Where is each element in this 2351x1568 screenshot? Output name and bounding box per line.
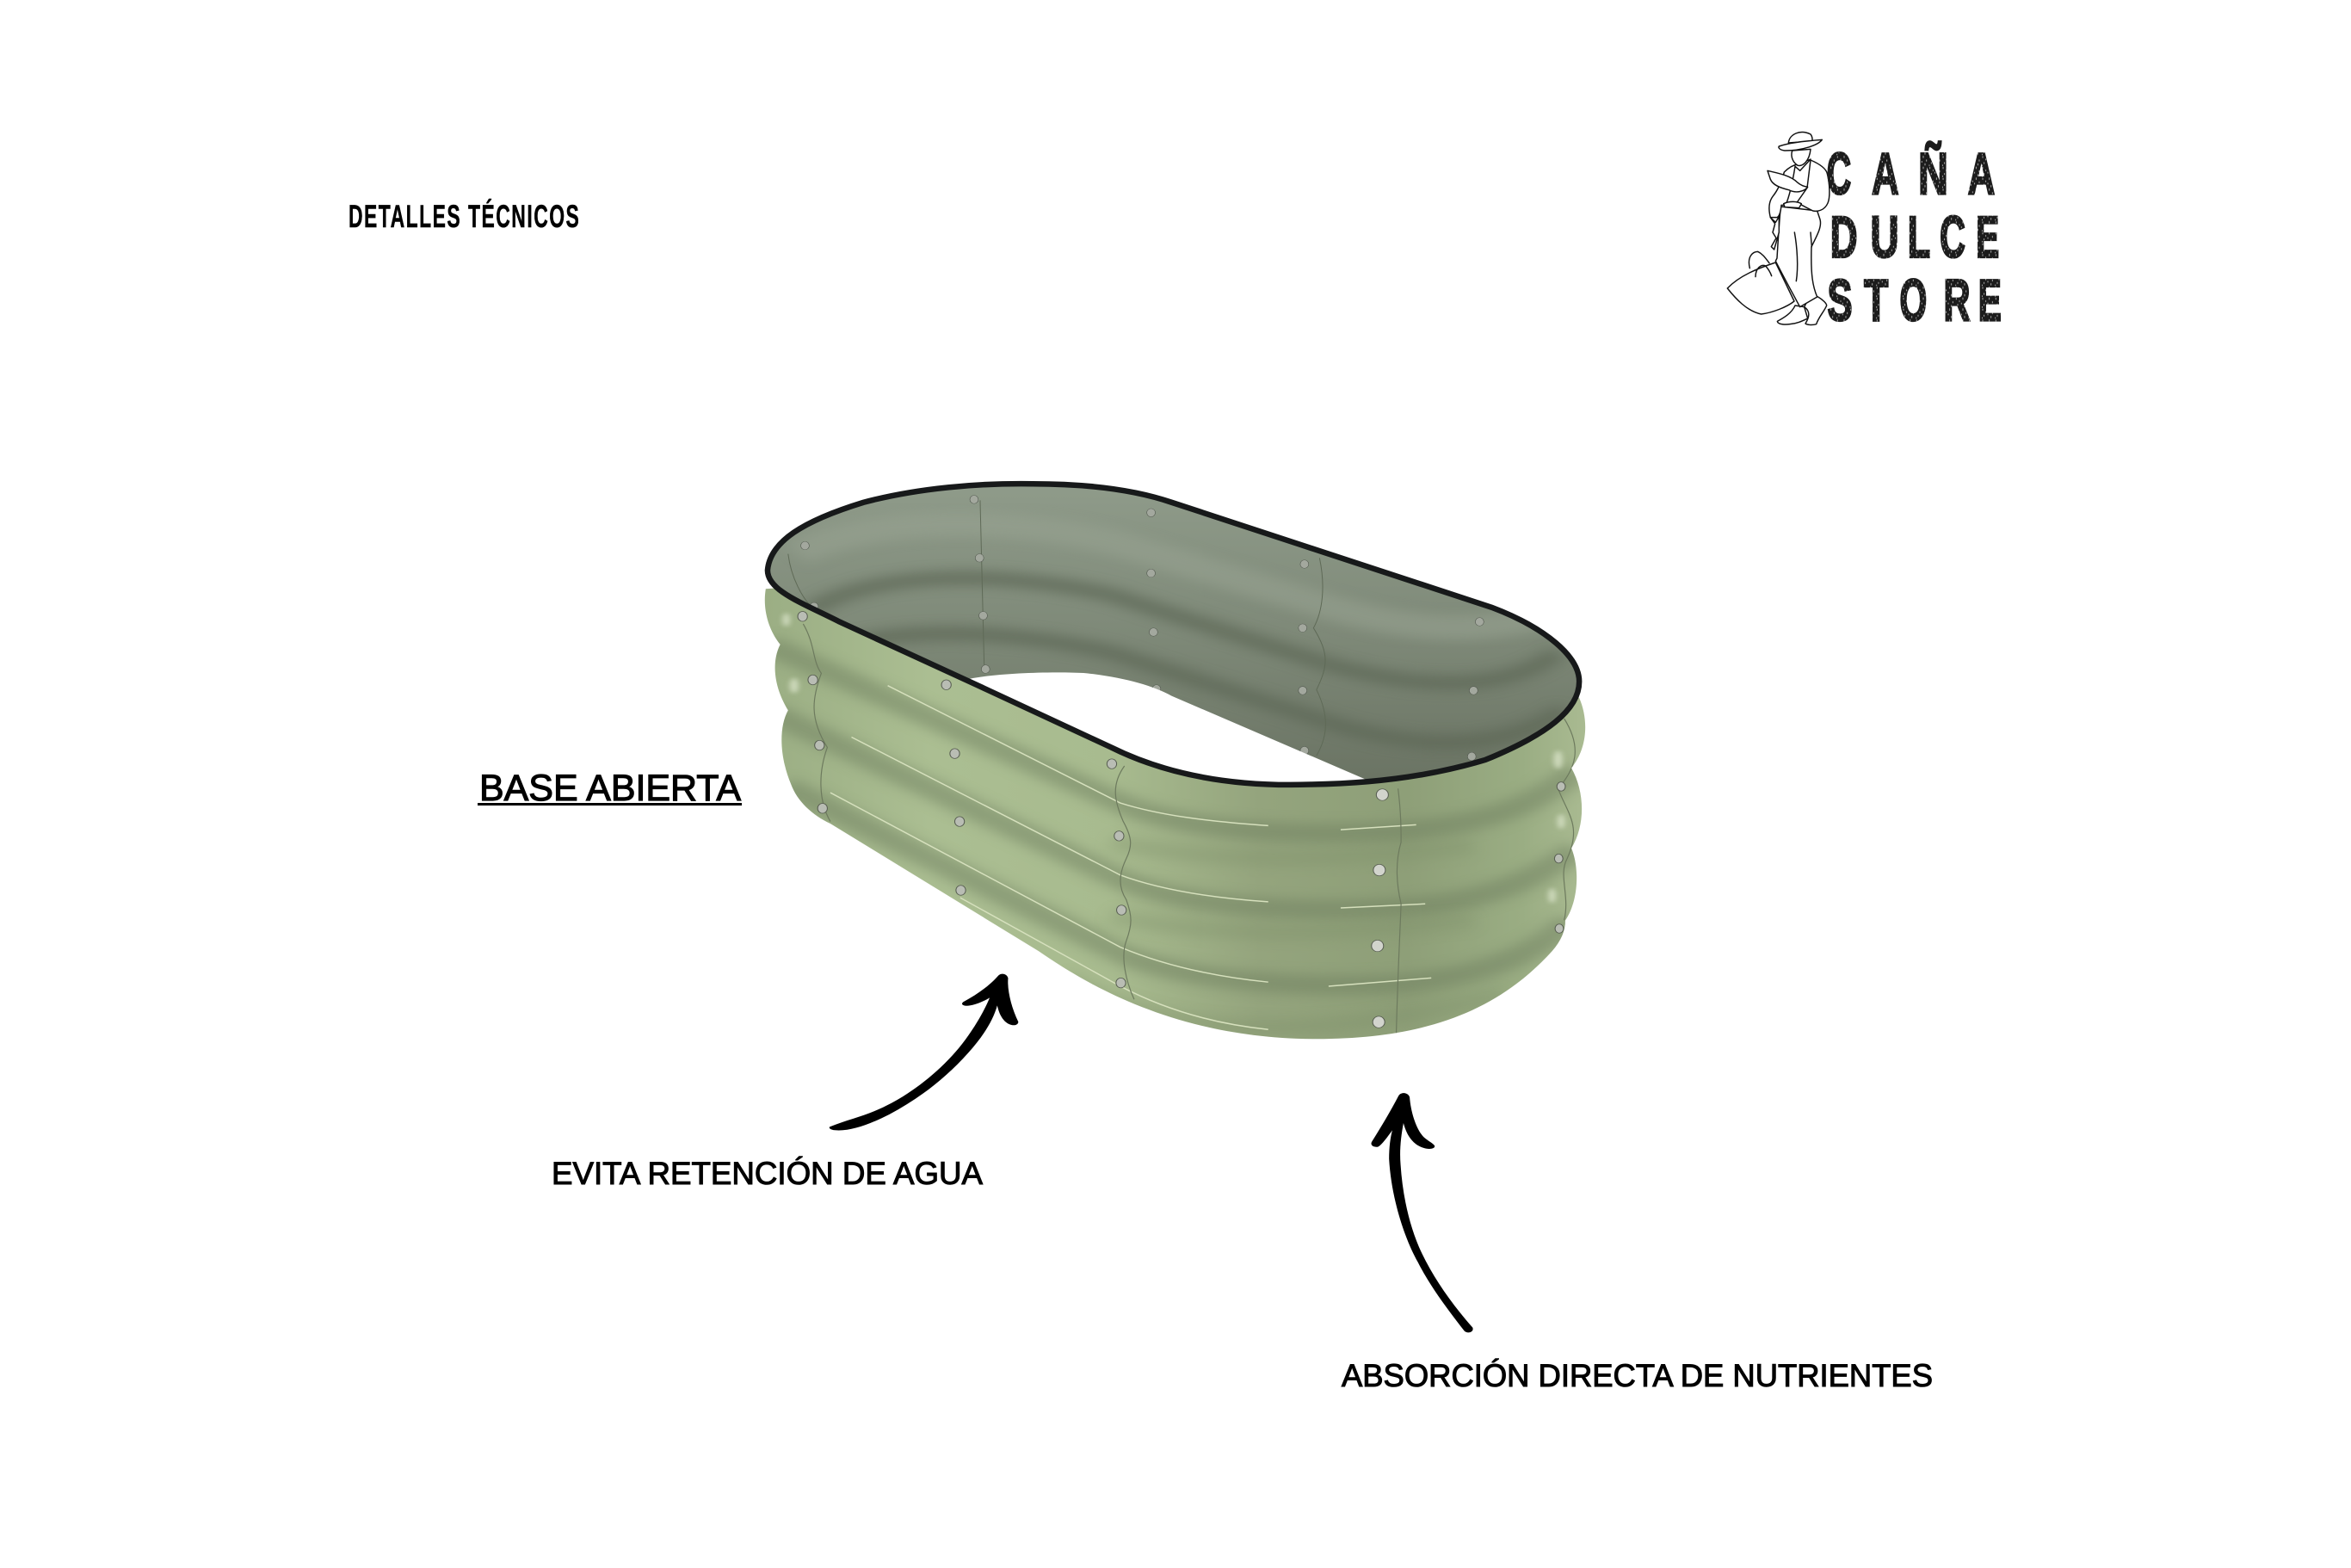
label: base abierta: BASE ABIERTA xyxy=(479,768,741,809)
panel seams xyxy=(803,624,1575,1034)
logo wordmark: O xyxy=(1899,268,1927,333)
title: detalles técnicos: DETALLES TÉCNICOS xyxy=(349,198,579,234)
outer bolts xyxy=(798,612,1565,1028)
arrow: points to base, evita retención xyxy=(830,974,1018,1131)
logo figure: farmer with basket xyxy=(1727,133,1830,325)
logo wordmark: S xyxy=(1827,268,1853,333)
inner bolts xyxy=(801,496,1484,761)
arrow: points to base, absorción directa xyxy=(1372,1093,1473,1332)
logo wordmark: D xyxy=(1830,205,1858,270)
logo wordmark: E xyxy=(1976,205,1999,270)
logo wordmark: C xyxy=(1940,205,1965,270)
logo wordmark: A xyxy=(1872,142,1899,207)
logo wordmark: Ñ xyxy=(1918,142,1948,207)
logo wordmark: R xyxy=(1943,268,1971,333)
planter: oval corrugated raised garden bed xyxy=(765,484,1585,1039)
label: evita retención de agua: EVITA RETENCIÓN DE AGUA xyxy=(552,1155,983,1191)
logo: Caña Dulce Store xyxy=(1727,133,2002,333)
label: absorción directa de nutrientes: ABSORCIÓN DIRECTA DE NUTRIENTES xyxy=(1342,1357,1933,1393)
logo wordmark: E xyxy=(1978,268,2002,333)
planter inner wall xyxy=(768,484,1579,785)
logo wordmark: T xyxy=(1864,268,1888,333)
logo wordmark: A xyxy=(1968,142,1995,207)
logo wordmark: C xyxy=(1827,142,1851,207)
logo wordmark xyxy=(1827,142,2002,333)
highlights on left end of wall xyxy=(782,613,1564,903)
planter open base: white opening xyxy=(963,672,1368,785)
logo wordmark: L xyxy=(1908,205,1930,270)
planter outer wall xyxy=(765,554,1585,1039)
planter black rim xyxy=(768,484,1579,785)
logo wordmark: U xyxy=(1870,205,1899,270)
